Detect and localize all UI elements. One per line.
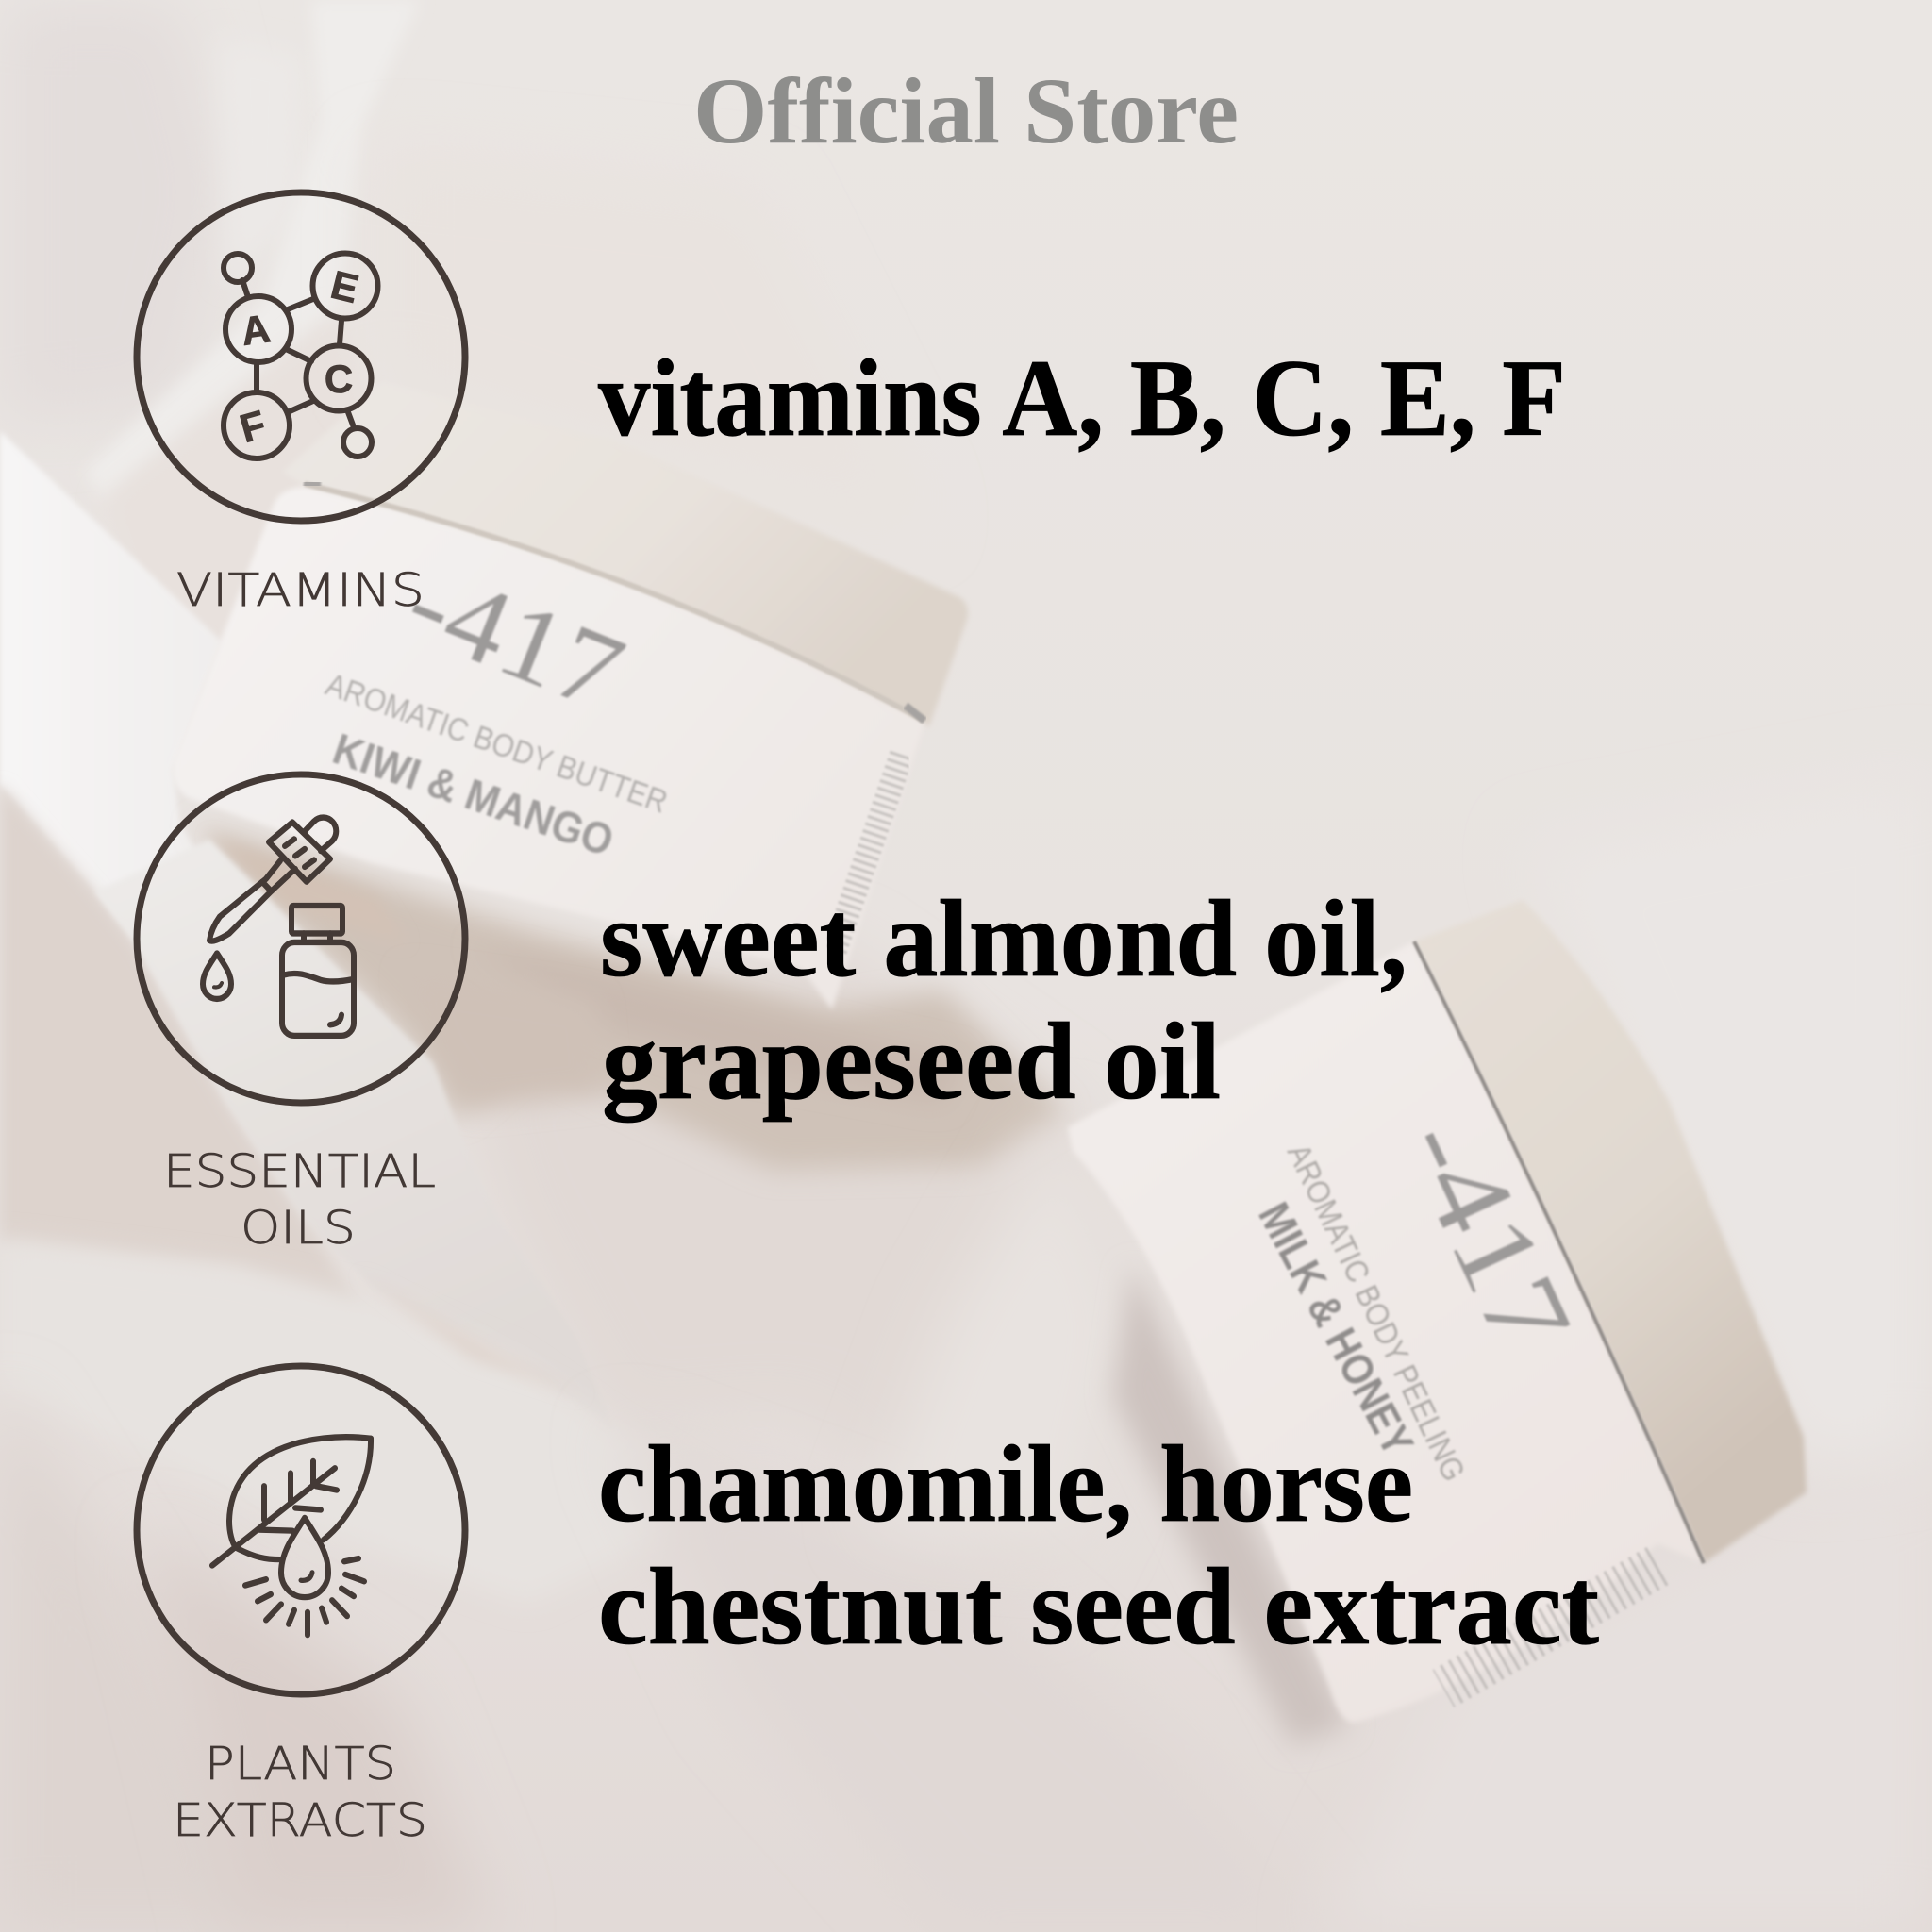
jar rim line bbox=[305, 484, 924, 721]
jar two: milk and honey body peeling bbox=[1068, 900, 1807, 1723]
text: oils list: sweet almond oil, bbox=[600, 878, 1407, 1000]
label: essential oils: OILS bbox=[241, 1202, 356, 1255]
label: essential oils bbox=[163, 1145, 436, 1255]
jar one flavour: KIWI & MANGO bbox=[327, 724, 620, 865]
shadow under jar two bbox=[1113, 1264, 1349, 1745]
icon: vitamins badge: A bbox=[239, 306, 273, 354]
jar two flavour: MILK & HONEY bbox=[1249, 1194, 1424, 1463]
text: oils list: grapeseed oil bbox=[602, 1001, 1221, 1123]
label: essential oils: ESSENTIAL bbox=[163, 1145, 436, 1198]
white fold on the left bbox=[0, 431, 226, 940]
jar one product line: AROMATIC BODY BUTTER bbox=[321, 667, 672, 821]
lower left light drape bbox=[0, 1241, 736, 1604]
text: oils list bbox=[600, 878, 1407, 1123]
text: plants list: chestnut seed extract bbox=[598, 1546, 1599, 1668]
jar two rim line bbox=[1414, 941, 1704, 1563]
text: plants list: chamomile, horse bbox=[598, 1424, 1413, 1545]
jar two brand number: -417 bbox=[1380, 1099, 1596, 1370]
icon: vitamins badge bbox=[137, 192, 465, 521]
text: vitamins list: vitamins A, B, C, E, F bbox=[598, 338, 1566, 459]
label: plants extracts: PLANTS bbox=[205, 1738, 396, 1790]
jar two product line: AROMATIC BODY PEELING bbox=[1280, 1139, 1472, 1487]
icon: essential oils badge bbox=[137, 774, 465, 1103]
icon: vitamins badge: F bbox=[235, 402, 271, 451]
icon: vitamins badge: E bbox=[326, 262, 363, 311]
broad warm area under the jars bbox=[453, 943, 1132, 1604]
jar one brand number: -417 bbox=[391, 541, 639, 734]
tan shadow under jar one bbox=[193, 823, 1066, 1170]
text: plants list bbox=[598, 1424, 1599, 1668]
label: plants extracts bbox=[173, 1738, 427, 1847]
label: plants extracts: EXTRACTS bbox=[173, 1794, 427, 1847]
label: vitamins: VITAMINS bbox=[176, 564, 425, 617]
tan column on the left bbox=[0, 784, 361, 1308]
icon: plant extracts badge bbox=[137, 1366, 465, 1694]
icon: vitamins badge: C bbox=[325, 357, 353, 401]
jar one: kiwi and mango body butter bbox=[173, 382, 968, 1009]
jar two fine print stripes bbox=[1443, 1566, 1657, 1689]
jar one fine print stripes bbox=[834, 755, 902, 953]
light fold band bbox=[94, 840, 613, 1429]
title: Official Store bbox=[693, 58, 1239, 163]
